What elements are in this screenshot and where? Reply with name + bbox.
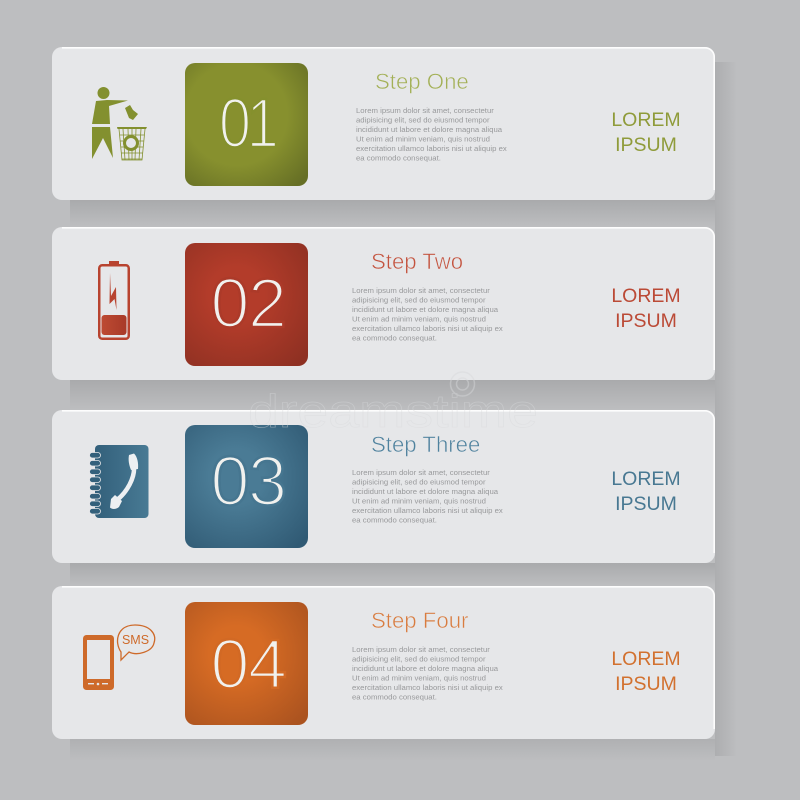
panel: step three (52, 410, 715, 563)
watermark: dreamstime (248, 385, 538, 437)
panel: step one (52, 47, 715, 200)
text block: Ut enim ad minim veniam, quis nostrud (352, 674, 486, 682)
card background (52, 586, 715, 739)
card shadows (70, 62, 737, 761)
heading: Step Four: Step Four (371, 608, 469, 633)
number tile 01: 01 (219, 84, 279, 162)
number tile 02 (185, 243, 308, 366)
text block: incididunt ut labore et dolore magna aliqua (356, 125, 503, 134)
text block: exercitation ullamco laboris nisi ut aliquip ex (352, 324, 503, 333)
label: Lorem Ipsum: LOREM (611, 468, 681, 490)
text block: adipisicing elit, sed do eiusmod tempor (352, 654, 486, 664)
icon: smartphone with SMS bubble: SMS (122, 633, 149, 647)
text block: Lorem ipsum dolor sit amet, consectetur (352, 645, 490, 654)
label: Lorem Ipsum: IPSUM (615, 310, 677, 332)
text block: Ut enim ad minim veniam, quis nostrud (352, 496, 486, 506)
icon: person recycling litter (92, 87, 147, 160)
text block: exercitation ullamco laboris nisi ut aliquip ex (352, 683, 503, 692)
number tile 04: 04 (210, 625, 287, 703)
label: Lorem Ipsum: LOREM (611, 285, 681, 307)
text block: adipisicing elit, sed do eiusmod tempor (356, 116, 490, 124)
text block: Lorem ipsum dolor sit amet, consectetur (356, 106, 494, 115)
number tile 01 (185, 63, 308, 186)
label: Lorem Ipsum: LOREM (611, 648, 681, 670)
label: Lorem Ipsum: IPSUM (615, 673, 677, 695)
text block: exercitation ullamco laboris nisi ut aliquip ex (356, 144, 507, 153)
card background (52, 410, 715, 563)
text block: adipisicing elit, sed do eiusmod tempor (352, 478, 486, 486)
watermark (248, 372, 538, 437)
panel: step two (52, 227, 715, 380)
text block: ea commodo consequat. (352, 692, 437, 702)
card background (52, 227, 715, 380)
text block: adipisicing elit, sed do eiusmod tempor (352, 296, 486, 304)
icon: low battery (99, 261, 129, 339)
label: Lorem Ipsum: IPSUM (615, 134, 677, 156)
text block: Lorem ipsum dolor sit amet, consectetur (352, 468, 490, 477)
heading: Step One: Step One (375, 69, 469, 94)
text block: ea commodo consequat. (356, 154, 441, 162)
icon: phone book (90, 445, 148, 518)
number tile 04 (185, 602, 308, 725)
text block: Ut enim ad minim veniam, quis nostrud (356, 134, 490, 144)
panel: step four (52, 586, 715, 739)
text block: incididunt ut labore et dolore magna aliqua (352, 487, 499, 496)
label: Lorem Ipsum: LOREM (611, 109, 681, 131)
heading: Step Two: Step Two (371, 249, 463, 274)
text block: incididunt ut labore et dolore magna aliqua (352, 664, 499, 673)
text block: Ut enim ad minim veniam, quis nostrud (352, 314, 486, 324)
text block: ea commodo consequat. (352, 516, 437, 524)
text block: ea commodo consequat. (352, 334, 437, 342)
text block: exercitation ullamco laboris nisi ut aliquip ex (352, 506, 503, 515)
icon: smartphone with SMS bubble (83, 625, 155, 690)
label: Lorem Ipsum: IPSUM (615, 493, 677, 515)
number tile 03: 03 (210, 442, 287, 520)
text block: Lorem ipsum dolor sit amet, consectetur (352, 286, 490, 295)
text block: incididunt ut labore et dolore magna aliqua (352, 305, 499, 314)
heading: Step Three: Step Three (371, 432, 480, 457)
number tile 03 (185, 425, 308, 548)
number tile 02: 02 (210, 264, 287, 342)
card background (52, 47, 715, 200)
